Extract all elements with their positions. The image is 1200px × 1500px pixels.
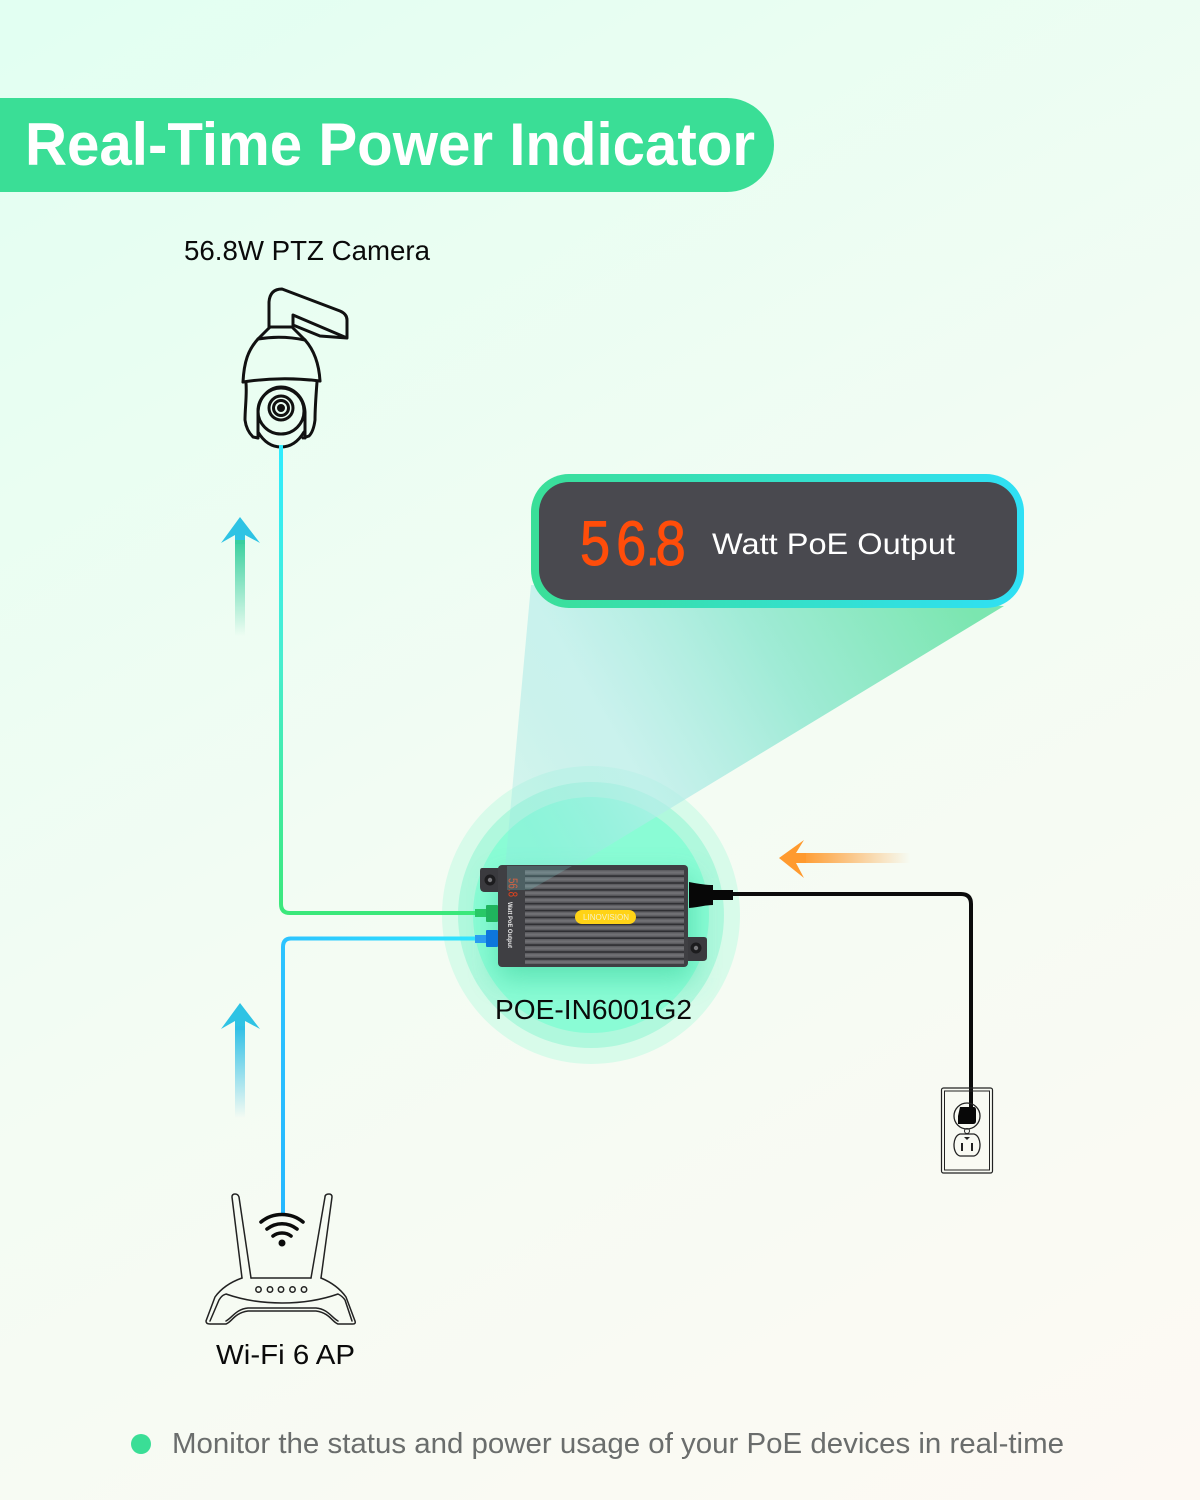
mains plug in socket	[958, 1107, 976, 1124]
glow rings behind injector	[442, 766, 740, 1064]
cable: access point vertical run	[283, 938, 291, 1215]
injector body	[498, 865, 688, 967]
ethernet plug: green	[475, 905, 498, 922]
antennas	[232, 1194, 332, 1278]
brand badge: LINOVISION	[583, 913, 629, 922]
heat-sink ribs	[525, 870, 684, 964]
cable: mains power	[730, 894, 971, 1112]
cable: camera to injector	[281, 445, 490, 913]
ethernet plug: blue	[475, 930, 498, 947]
arrow: upward from access point	[221, 1003, 260, 1118]
footer note: Monitor the status and power usage of your PoE devices in real-time	[172, 1428, 1064, 1460]
device label: POE-IN6001G2	[495, 994, 692, 1025]
device: PoE injector	[475, 865, 733, 967]
power plug	[689, 882, 733, 908]
display reflection	[507, 866, 572, 890]
callout: power display	[531, 474, 1024, 608]
camera label: 56.8W PTZ Camera	[184, 235, 430, 266]
wifi symbol	[261, 1214, 303, 1246]
icon: PTZ camera	[243, 289, 347, 447]
mounting ear: top left	[480, 868, 500, 892]
light beam from display	[505, 585, 1004, 868]
display reading: 56.8	[580, 509, 686, 579]
icon: Wi-Fi access point	[206, 1194, 355, 1324]
cable: access point horizontal run	[290, 936, 490, 940]
brand badge	[575, 910, 636, 924]
device display digits: 56.8	[506, 878, 520, 897]
mounting ear: bottom right	[686, 937, 707, 961]
display caption: Watt PoE Output	[712, 528, 956, 561]
status lights	[256, 1287, 307, 1292]
device printed caption: Watt PoE Output	[506, 902, 512, 948]
title banner: Real-Time Power Indicator	[25, 111, 755, 178]
title banner	[0, 98, 774, 192]
arrow: power input	[779, 840, 910, 878]
router body	[206, 1278, 355, 1324]
access point label: Wi-Fi 6 AP	[216, 1339, 355, 1370]
arrow: upward to camera	[221, 517, 260, 636]
icon: wall outlet	[942, 1088, 992, 1173]
